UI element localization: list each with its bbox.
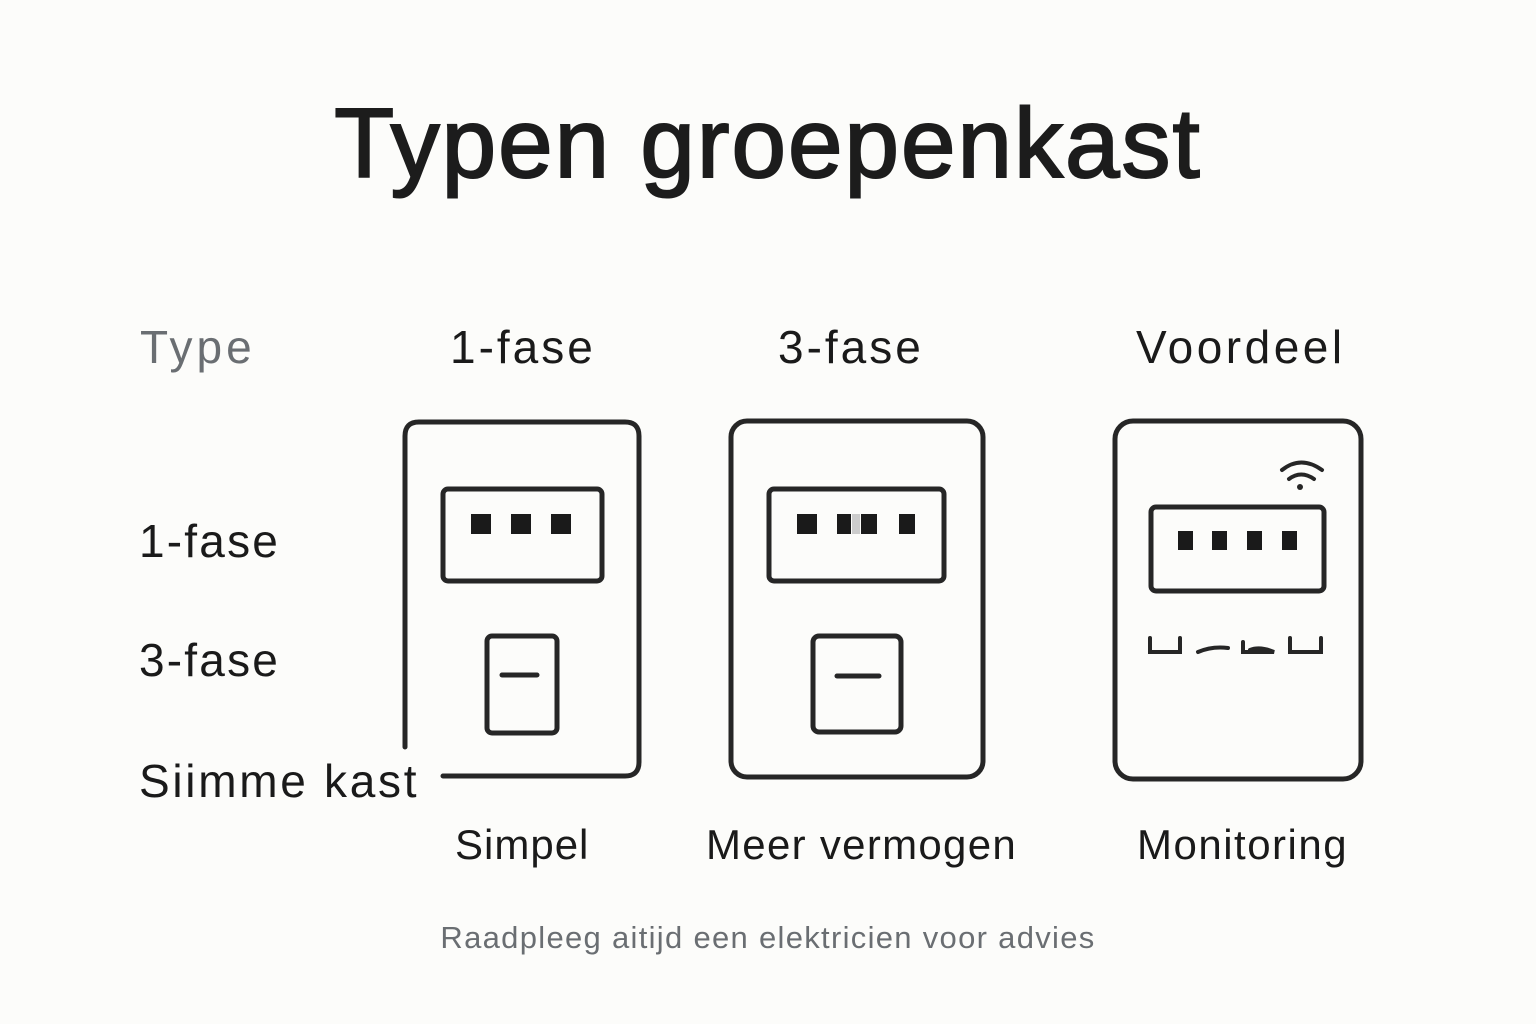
- title: Typen groepenkast: [334, 88, 1202, 198]
- header: Type: Type: [140, 321, 256, 373]
- row label: 3-fase: 3-fase: [139, 634, 280, 686]
- icon: 3-fase box: [731, 421, 983, 777]
- header: Voordeel: Voordeel: [1136, 321, 1346, 373]
- footer note: Raadpleeg aitijd een elektricien voor advies: [440, 920, 1096, 955]
- label: Simpel: Simpel: [455, 821, 589, 868]
- header: 1-fase: 1-fase: [450, 321, 596, 373]
- header: 3-fase: 3-fase: [778, 321, 924, 373]
- icon: 1-fase box: [405, 422, 639, 776]
- label: Monitoring: Monitoring: [1137, 821, 1348, 868]
- row label: 1-fase: 1-fase: [139, 515, 280, 567]
- row label: Siimme kast: Siimme kast: [139, 755, 419, 807]
- label: Meer vermogen: Meer vermogen: [706, 821, 1017, 868]
- icon: smart box with wifi: [1115, 421, 1361, 779]
